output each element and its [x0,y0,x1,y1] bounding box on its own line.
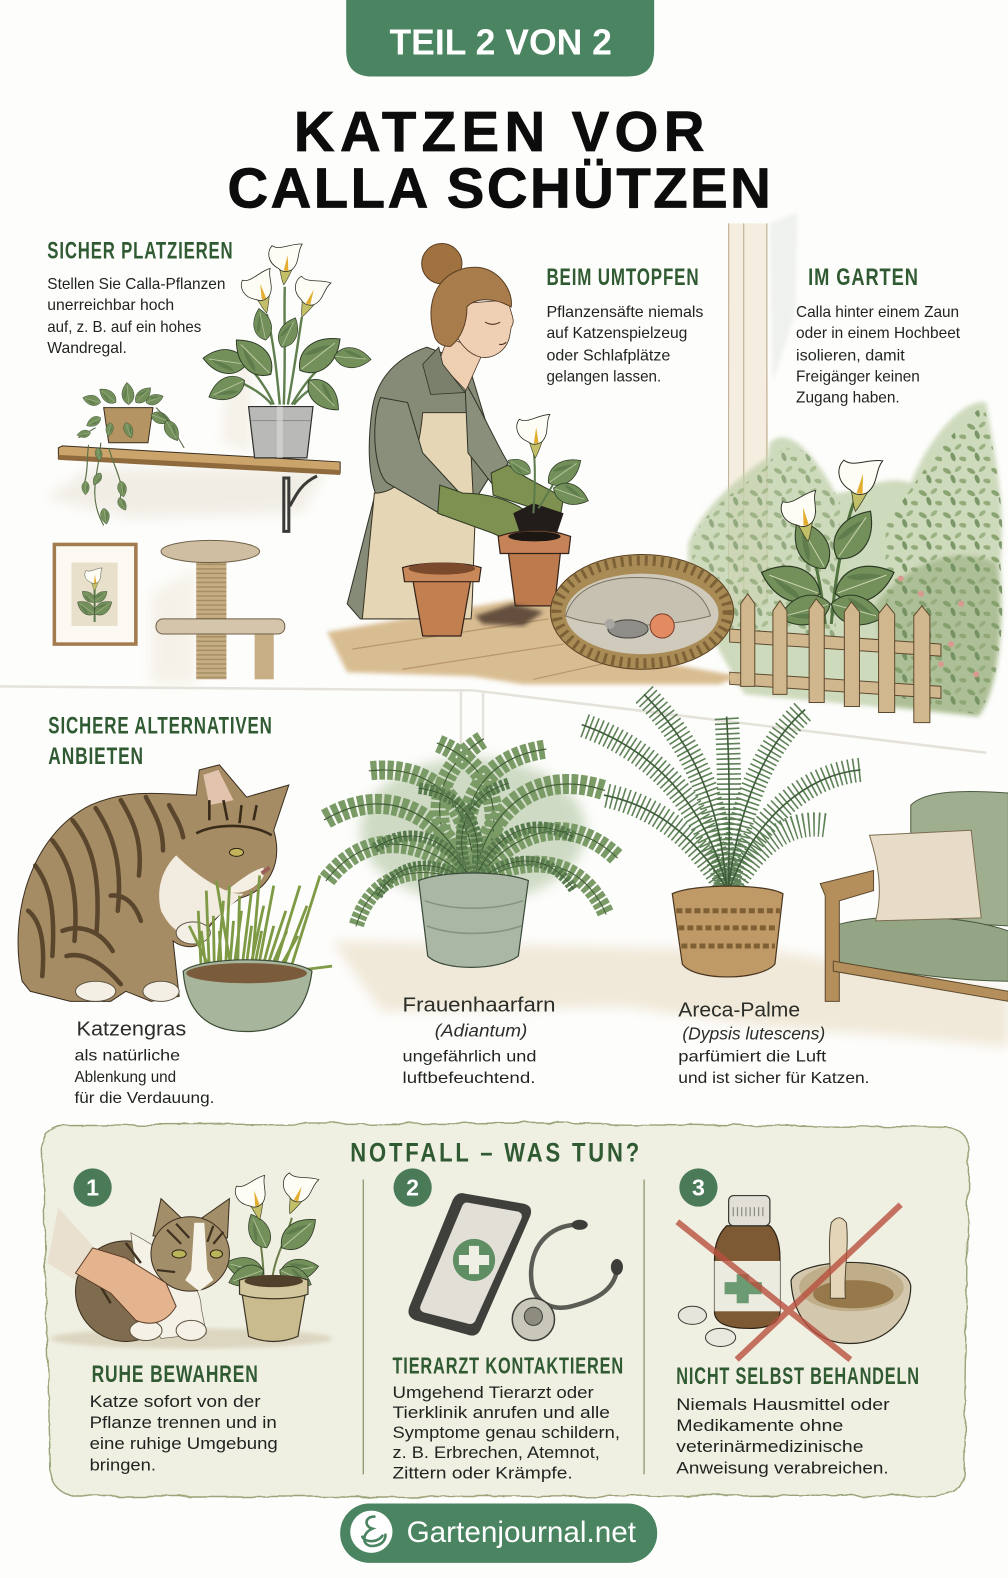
shirt arm near [375,398,458,515]
section divider: wall line [0,686,986,753]
section: im garten text: Freigänger keinen [796,368,920,385]
section: sicher platzieren text: SICHER PLATZIEREN [47,238,233,265]
text: frauenhaarfarn: ungefährlich und [403,1049,536,1066]
apron [362,413,475,619]
step 2 heading: TIERARZT KONTAKTIEREN [392,1353,624,1379]
divider two [643,1179,645,1474]
step 3 text: Niemals Hausmittel oder [676,1395,890,1414]
palm stems [582,694,860,886]
icon: tabby cat eating grass [18,765,289,1001]
text: katzengras: Ablenkung und [74,1069,176,1086]
section: im garten text: Calla hinter einem Zaun [796,304,959,321]
section: sicher platzieren text [47,238,233,357]
text: areca-palme: und ist sicher für Katzen. [678,1070,870,1087]
shrub wash [688,402,1002,717]
shrub foliage left [690,448,840,644]
icon: medicine bottle and pills [678,1196,780,1347]
icon: logo [350,1511,392,1553]
icon: garden calla [756,454,900,631]
text: frauenhaarfarn [403,994,556,1087]
icon: cat tree [156,540,285,679]
shirt back and skirt [347,347,498,619]
text: frauenhaarfarn: (Adiantum) [435,1022,527,1041]
cat [75,1199,229,1342]
sleeve [47,1208,93,1280]
title: KATZEN VOR [294,100,704,163]
step 3 text: Anweisung verabreichen. [676,1458,889,1477]
illustration: woman potting plant [347,244,564,619]
face [453,300,513,358]
shirt arm far [465,382,508,485]
step 1 text: Katze sofort von der [90,1392,261,1411]
calla pot plant [223,1168,323,1342]
icon: cat bed with toys [550,555,734,669]
illustration: cat with hand and calla [47,1168,332,1349]
section: sicher platzieren text: Wandregal. [47,340,127,357]
section: im garten text: Zugang haben. [796,390,900,407]
step 1 text: Pflanze trennen und in [90,1413,277,1432]
heading: sichere alternativen [48,713,273,770]
palm fronds [582,694,860,886]
panel background [42,1123,969,1496]
illustration: sofa [820,791,1008,1001]
icon: areca palm in basket [582,694,860,977]
glove far [491,465,564,525]
section: sicher platzieren text: Stellen Sie Calla-Pflanzen [47,276,225,293]
step 2 text: Zittern oder Krämpfe. [392,1463,573,1482]
step 1 text [90,1392,278,1474]
illustration: wall shadows [45,342,327,684]
back fronds [323,735,620,968]
section: beim umtopfen text: BEIM UMTOPFEN [546,264,699,291]
step 3 text [676,1395,890,1477]
step 2 badge: 2 [406,1175,419,1201]
step 1 badge: 1 [86,1175,99,1201]
footer badge: Gartenjournal.net [407,1517,636,1549]
hair bun [422,244,462,284]
top banner: part label [346,0,654,76]
fern wash [360,758,586,903]
section: im garten text [796,264,961,407]
illustration: floor wash [332,941,1008,1047]
text: areca-palme: parfümiert die Luft [678,1049,827,1066]
cat head [151,1199,229,1291]
step 2 text: Tierklinik anrufen und alle [392,1403,610,1422]
icon: wooden fence [730,594,941,723]
glove near [438,485,535,538]
icon: wooden wall shelf [58,446,340,531]
footer badge [340,1504,657,1563]
text: katzengras: Katzengras [76,1019,186,1041]
text: katzengras: als natürliche [74,1048,180,1065]
icon: repotting plant and pot [498,414,592,606]
step 2 text: Umgehend Tierarzt oder [392,1383,594,1402]
tabby stripes [28,797,183,984]
section: beim umtopfen text: oder Schlafplätze [546,347,670,364]
text: frauenhaarfarn: luftbefeuchtend. [403,1070,535,1087]
step 2 text: z. B. Erbrechen, Atemnot, [392,1443,600,1462]
text: frauenhaarfarn: Frauenhaarfarn [403,994,556,1016]
icon: maidenhair fern in pot [323,735,620,968]
step 1 heading: RUHE BEWAHREN [92,1361,259,1388]
hand [75,1248,176,1323]
divider one [362,1179,364,1474]
heading: sichere alternativen: SICHERE ALTERNATIVEN [48,713,273,740]
panel: notfall [42,1123,969,1496]
front fronds [373,780,576,938]
panel heading: NOTFALL – WAS TUN? [350,1136,642,1167]
soil scatter [475,604,543,626]
step 2 badge [393,1168,432,1207]
step 2 text [392,1383,620,1482]
top banner: part label: TEIL 2 VON 2 [389,21,612,62]
text: areca-palme: Areca-Palme [678,999,800,1021]
section: im garten text: oder in einem Hochbeet [796,325,961,342]
step 3 text: Medikamente ohne [676,1416,843,1435]
section: im garten text: IM GARTEN [808,264,919,291]
icon: cat grass bowl [183,876,332,1032]
step 1 text: eine ruhige Umgebung [90,1434,278,1453]
collar [423,347,465,394]
illustration: garden shrubs [688,402,1002,717]
icon: framed calla picture [54,544,136,644]
illustration: window frame [729,213,797,624]
neck [439,337,483,390]
section: beim umtopfen text [546,264,704,385]
step 3 badge: 3 [692,1175,705,1201]
text: katzengras: für die Verdauung. [74,1090,214,1107]
heading: sichere alternativen: ANBIETEN [48,743,144,770]
section: sicher platzieren text: unerreichbar hoch [47,297,174,314]
section: beim umtopfen text: Pflanzensäfte niemals [546,304,704,321]
step 3 badge [679,1168,718,1207]
section: beim umtopfen text: auf Katzenspielzeug [546,325,687,342]
step 1 text: bringen. [90,1455,156,1474]
title [227,100,771,219]
icon: stethoscope [512,1220,623,1340]
step 3 text: veterinärmedizinische [676,1437,863,1456]
icon: mortar bowl [791,1218,911,1344]
icon: red cross-out [677,1205,901,1360]
icon: empty terracotta pot [403,563,481,636]
text: katzengras [74,1019,214,1107]
text: areca-palme [678,999,870,1087]
text: areca-palme: (Dypsis lutescens) [682,1025,825,1044]
section: sicher platzieren text: auf, z. B. auf ein hohes [47,319,201,336]
section: beim umtopfen text: gelangen lassen. [546,368,661,385]
icon: calla in grey pot [201,241,372,458]
hair [431,267,511,346]
step 2 text: Symptome genau schildern, [392,1423,620,1442]
title: CALLA SCHÜTZEN [227,156,771,219]
step 1 badge [73,1168,112,1207]
illustration: potting table [327,594,740,684]
shrub foliage right [886,405,1002,715]
illustration: shelf with plants [58,241,372,531]
section: im garten text: isolieren, damit [796,347,905,364]
icon: phone with medical cross [408,1193,531,1336]
icon: trailing plant pot [76,382,184,448]
